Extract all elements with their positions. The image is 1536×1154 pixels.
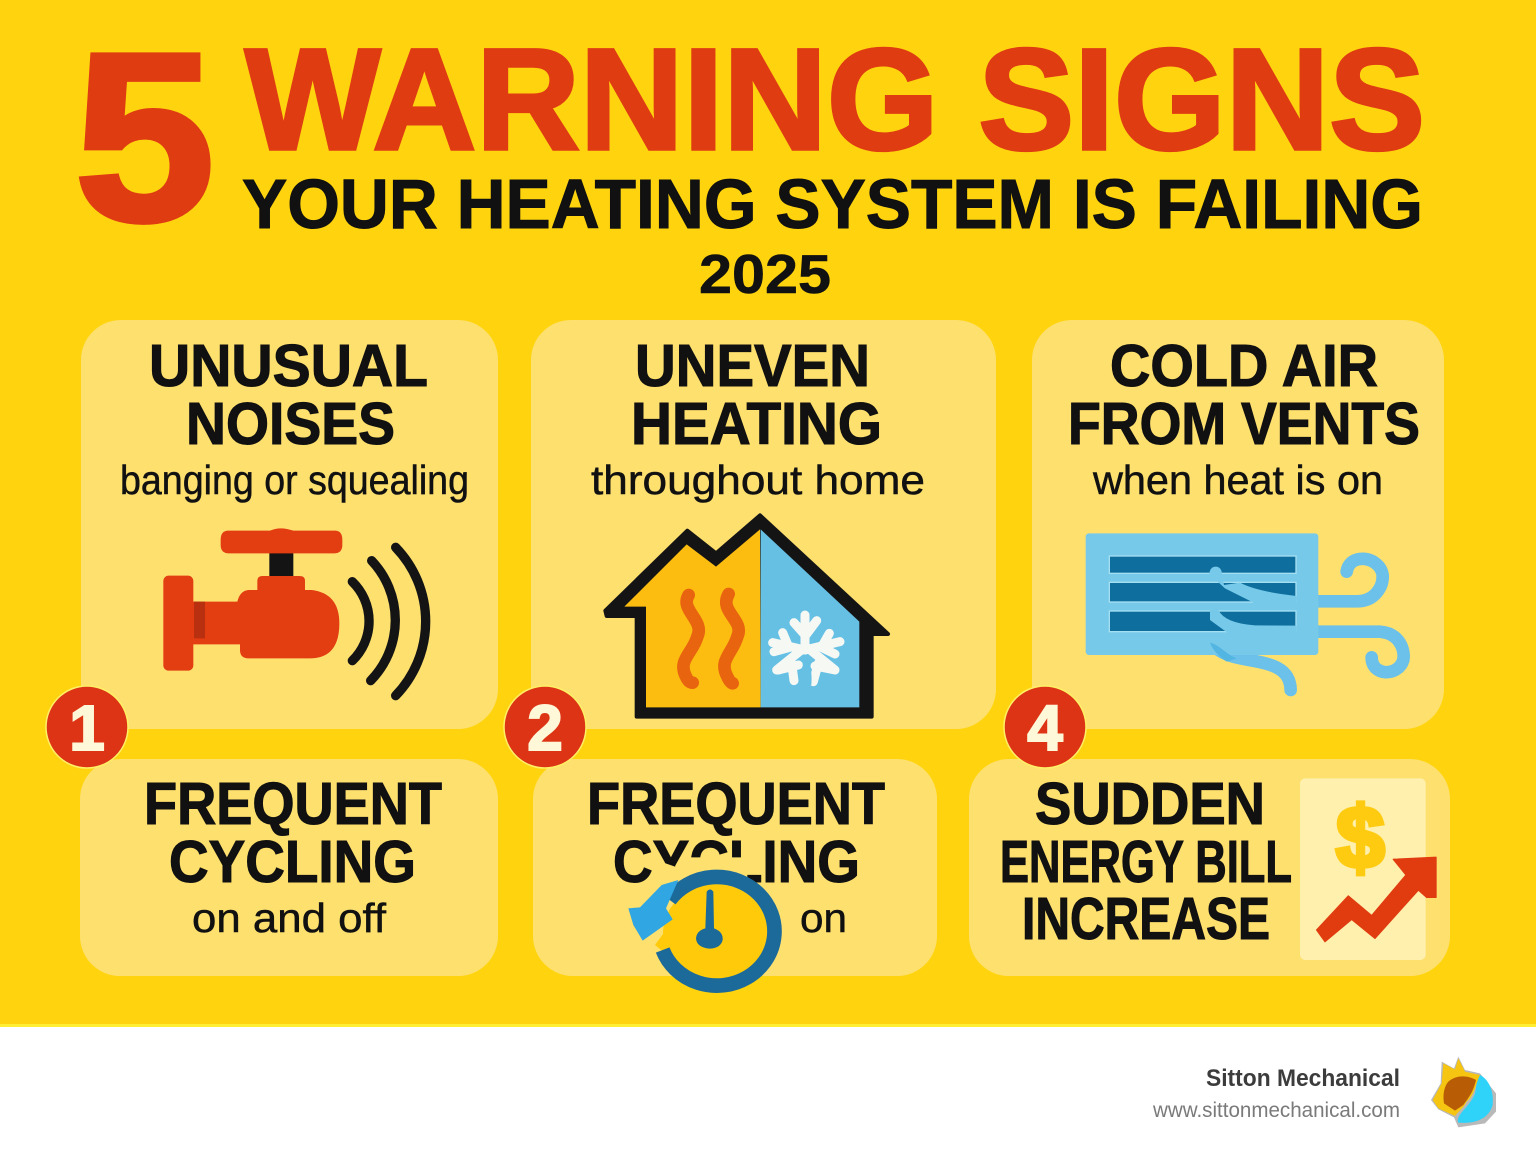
subheading: YOUR HEATING SYSTEM IS FAILING (242, 165, 1423, 243)
heading: warning signs: WARNING SIGNS (245, 19, 1425, 180)
heading: frequent cycling: FREQUENT (144, 771, 442, 837)
icon: air vent with cold air (1086, 533, 1404, 690)
year: 2025 (699, 243, 831, 305)
icon: half warm half cold house (605, 515, 888, 717)
heading: frequent cycling (144, 771, 442, 895)
website: www.sittonmechanical.com (1152, 1099, 1400, 1122)
icon: company logo (1431, 1057, 1496, 1127)
heading: uneven heating: UNEVEN (635, 333, 870, 399)
heading: uneven heating: HEATING (631, 391, 882, 457)
heading: sudden energy bill increase: SUDDEN (1035, 771, 1265, 837)
title (74, 3, 1425, 305)
panel: unusual noises (81, 320, 498, 729)
heading: sudden energy bill increase: INCREASE (1022, 886, 1270, 952)
text: on and off: on and off (192, 895, 387, 941)
heading: frequent cycling repeated: CYCLING (613, 829, 860, 895)
heading: sudden energy bill increase: ENERGY BILL (1000, 829, 1292, 895)
heading: cold air from vents: COLD AIR (1110, 333, 1378, 399)
icon: valve with sound waves (163, 528, 426, 696)
heading: cold air from vents (1068, 333, 1420, 457)
big number 5: 5 (74, 3, 215, 271)
icon: bill with rising arrow: $ (1336, 788, 1385, 886)
heading: frequent cycling repeated (587, 771, 885, 895)
footer (1152, 1057, 1496, 1127)
heading: uneven heating (631, 333, 882, 457)
text: throughout home: throughout home (591, 457, 925, 503)
heading: unusual noises: UNUSUAL (149, 333, 428, 399)
icon: bill with rising arrow (1300, 778, 1436, 960)
badge: number 2: 2 (527, 692, 563, 764)
badge: number 4 (1004, 686, 1086, 768)
panel: frequent cycling with clock (533, 759, 937, 986)
text: banging or squealing: banging or squealing (120, 457, 469, 503)
text: when heat is on: when heat is on (1092, 457, 1383, 503)
company name: Sitton Mechanical (1206, 1065, 1400, 1092)
panel: uneven heating (531, 320, 996, 729)
panel: frequent cycling (80, 759, 498, 976)
heading: unusual noises (149, 333, 428, 457)
panel: cold air from vents (1032, 320, 1444, 729)
badge: number 1: 1 (69, 692, 105, 764)
panel: sudden energy bill increase (969, 759, 1450, 976)
heading: frequent cycling repeated: FREQUENT (587, 771, 885, 837)
badge: number 1 (46, 686, 128, 768)
heading: unusual noises: NOISES (186, 391, 395, 457)
heading: sudden energy bill increase (1000, 771, 1292, 952)
badge: number 4: 4 (1027, 692, 1063, 764)
heading: frequent cycling: CYCLING (169, 829, 416, 895)
badge: number 2 (504, 686, 586, 768)
heading: cold air from vents: FROM VENTS (1068, 391, 1420, 457)
icon: clock with cycle arrow (628, 857, 774, 986)
text: on: on (800, 895, 847, 941)
